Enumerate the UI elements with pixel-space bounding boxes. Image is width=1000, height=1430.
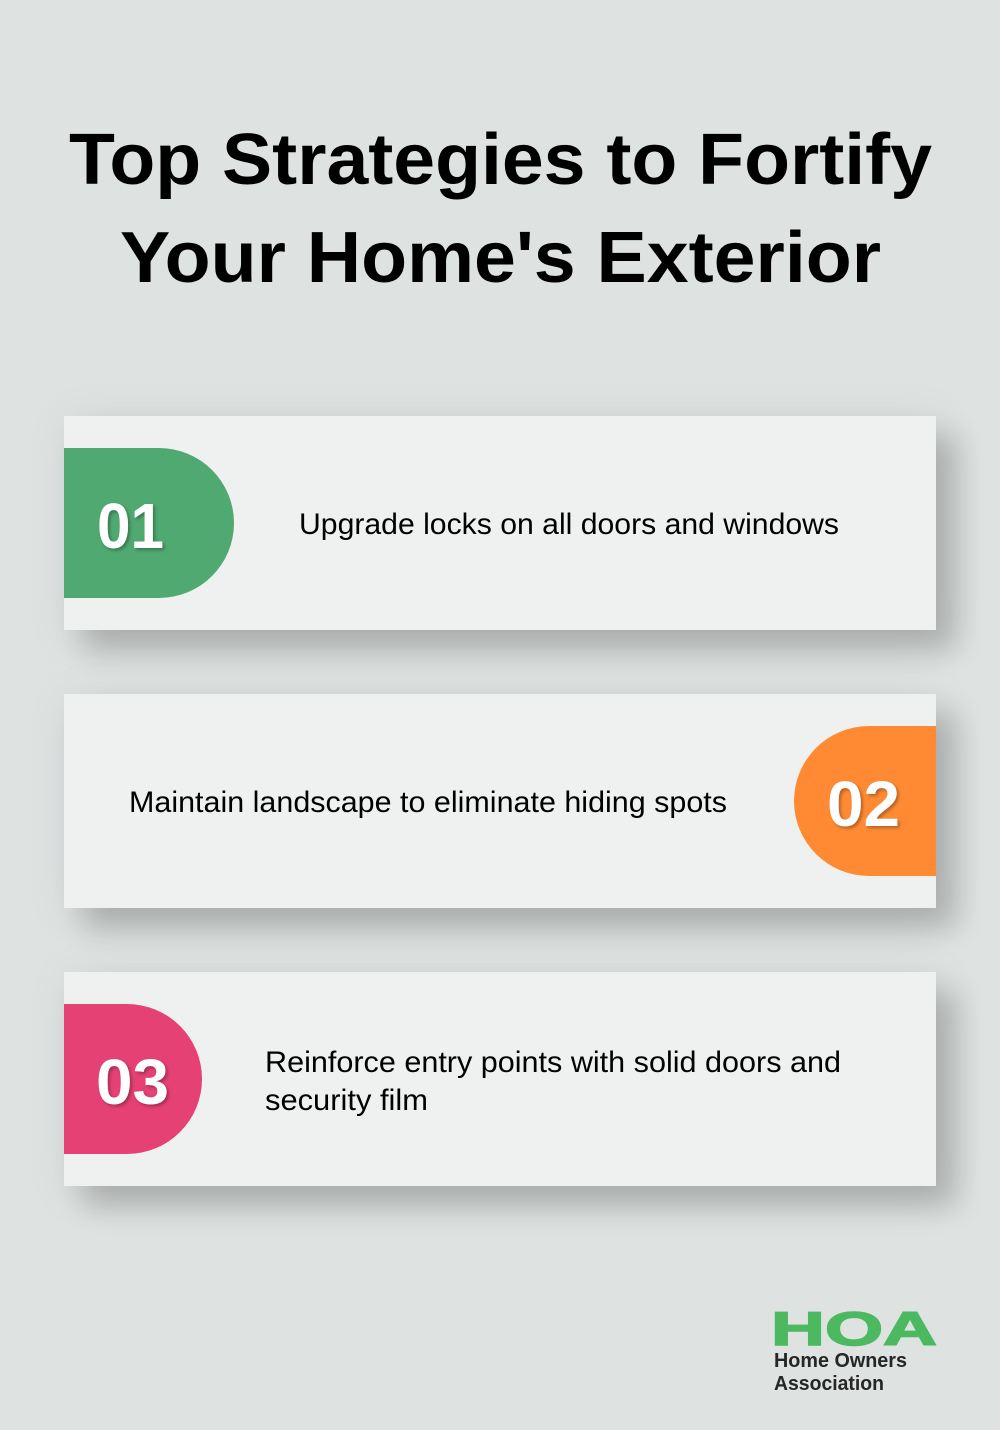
number: 03: 03 bbox=[96, 1046, 169, 1118]
text: step 03 bbox=[265, 1046, 841, 1117]
title bbox=[69, 120, 932, 298]
logo: HOA Home Owners Association: Home Owners bbox=[774, 1350, 907, 1372]
number: 01: 01 bbox=[97, 490, 164, 562]
title: Top Strategies to Fortify bbox=[69, 120, 932, 200]
title: Your Home's Exterior bbox=[120, 218, 881, 298]
text: step 02: Maintain landscape to eliminate hiding spots bbox=[129, 786, 727, 819]
badge: 02 bbox=[794, 726, 936, 876]
number: 02: 02 bbox=[827, 768, 900, 840]
logo: HOA Home Owners Association: HOA bbox=[771, 1302, 937, 1355]
text: step 03: security film bbox=[265, 1084, 428, 1117]
text: step 03: Reinforce entry points with solid doors and bbox=[265, 1046, 841, 1079]
logo: HOA Home Owners Association: Association bbox=[774, 1373, 884, 1395]
text: step 01: Upgrade locks on all doors and windows bbox=[299, 508, 839, 541]
panel: step 03 bbox=[64, 972, 956, 1206]
logo: HOA Home Owners Association bbox=[771, 1302, 937, 1395]
badge: 03 bbox=[64, 1004, 202, 1154]
badge: 01 bbox=[64, 448, 234, 598]
panel: step 01 bbox=[64, 416, 956, 650]
panel: step 02 bbox=[64, 694, 956, 928]
